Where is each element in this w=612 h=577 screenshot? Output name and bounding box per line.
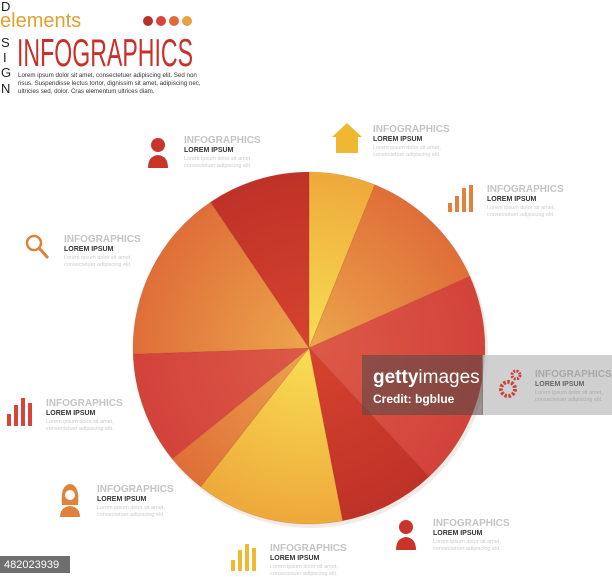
callout: person top: Lorem ipsum dolor sit amet, [184, 156, 252, 162]
header text block: ultricies sed, dolor. Cras elementum ultrices diam. [18, 88, 155, 95]
header: elements: elements [0, 10, 81, 32]
callout: person bottom: consectetuer adipiscing elit. [433, 546, 501, 552]
callout: person bottom: LOREM IPSUM [433, 530, 483, 537]
callout: bars bottom: LOREM IPSUM [270, 555, 320, 562]
callout: person top: LOREM IPSUM [184, 147, 234, 154]
callout: person bottom [396, 518, 510, 552]
callout: person bottom: Lorem ipsum dolor sit amet, [433, 539, 501, 545]
callout: woman: consectetuer adipiscing elit. [97, 512, 165, 518]
callout: woman [60, 484, 174, 518]
callout: person bottom: INFOGRAPHICS [433, 518, 510, 529]
callout: magnifier: consectetuer adipiscing elit. [64, 262, 132, 268]
header dots [143, 16, 192, 26]
id box [0, 556, 70, 573]
callout: bars top right: consectetuer adipiscing elit. [487, 212, 555, 218]
callout: magnifier: LOREM IPSUM [64, 246, 114, 253]
callout: house: LOREM IPSUM [373, 136, 423, 143]
header: vertical DESIGN: S [1, 35, 10, 50]
header text block [18, 72, 201, 95]
callout: woman: INFOGRAPHICS [97, 484, 174, 495]
callout: house [332, 123, 450, 158]
watermark: gettyimages [373, 367, 480, 388]
callout: gears: consectetuer adipiscing elit. [535, 397, 603, 403]
callout: woman: Lorem ipsum dolor sit amet, [97, 505, 165, 511]
callout: house: INFOGRAPHICS [373, 124, 450, 135]
callout: bars left: Lorem ipsum dolor sit amet, [46, 419, 114, 425]
callout: bars bottom [231, 543, 347, 577]
header text block: Lorem ipsum dolor sit amet, consectetuer adipiscing elit. Sed non [18, 72, 197, 79]
callout: bars bottom: INFOGRAPHICS [270, 543, 347, 554]
id box: 482023939 [4, 559, 59, 571]
header text block: risus. Suspendisse lectus tortor, dignissim sit amet, adipiscing nec, [18, 80, 201, 87]
callout: bars left: LOREM IPSUM [46, 410, 96, 417]
callout: bars top right: Lorem ipsum dolor sit amet, [487, 205, 555, 211]
watermark [362, 355, 612, 415]
callout: magnifier: Lorem ipsum dolor sit amet, [64, 255, 132, 261]
callout: house: consectetuer adipiscing elit. [373, 152, 441, 158]
callout: woman: LOREM IPSUM [97, 496, 147, 503]
callout: bars left [7, 398, 123, 432]
header: vertical DESIGN [1, 0, 11, 96]
header: vertical DESIGN: I [3, 50, 7, 65]
callout: person top [148, 135, 261, 169]
callout: bars top right: LOREM IPSUM [487, 196, 537, 203]
callout: gears: INFOGRAPHICS [535, 369, 612, 380]
callout: bars bottom: Lorem ipsum dolor sit amet, [270, 564, 338, 570]
callout: gears [501, 369, 612, 403]
callout: gears: Lorem ipsum dolor sit amet, [535, 390, 603, 396]
pie chart [133, 172, 488, 528]
callout: bars left: INFOGRAPHICS [46, 398, 123, 409]
callout: gears: LOREM IPSUM [535, 381, 585, 388]
callout: bars bottom: consectetuer adipiscing elit. [270, 571, 338, 577]
header: vertical DESIGN: N [1, 81, 10, 96]
header: vertical DESIGN: G [1, 65, 11, 80]
callout: bars left: consectetuer adipiscing elit. [46, 426, 114, 432]
callout: magnifier: INFOGRAPHICS [64, 234, 141, 245]
callout: person top: consectetuer adipiscing elit. [184, 163, 252, 169]
watermark: Credit: bgblue [373, 392, 455, 406]
callout: bars top right [448, 184, 564, 218]
callout: bars top right: INFOGRAPHICS [487, 184, 564, 195]
callout: magnifier [27, 234, 141, 268]
callout: person top: INFOGRAPHICS [184, 135, 261, 146]
callout: house: Lorem ipsum dolor sit amet, [373, 145, 441, 151]
header title: INFOGRAPHICS [17, 32, 193, 75]
